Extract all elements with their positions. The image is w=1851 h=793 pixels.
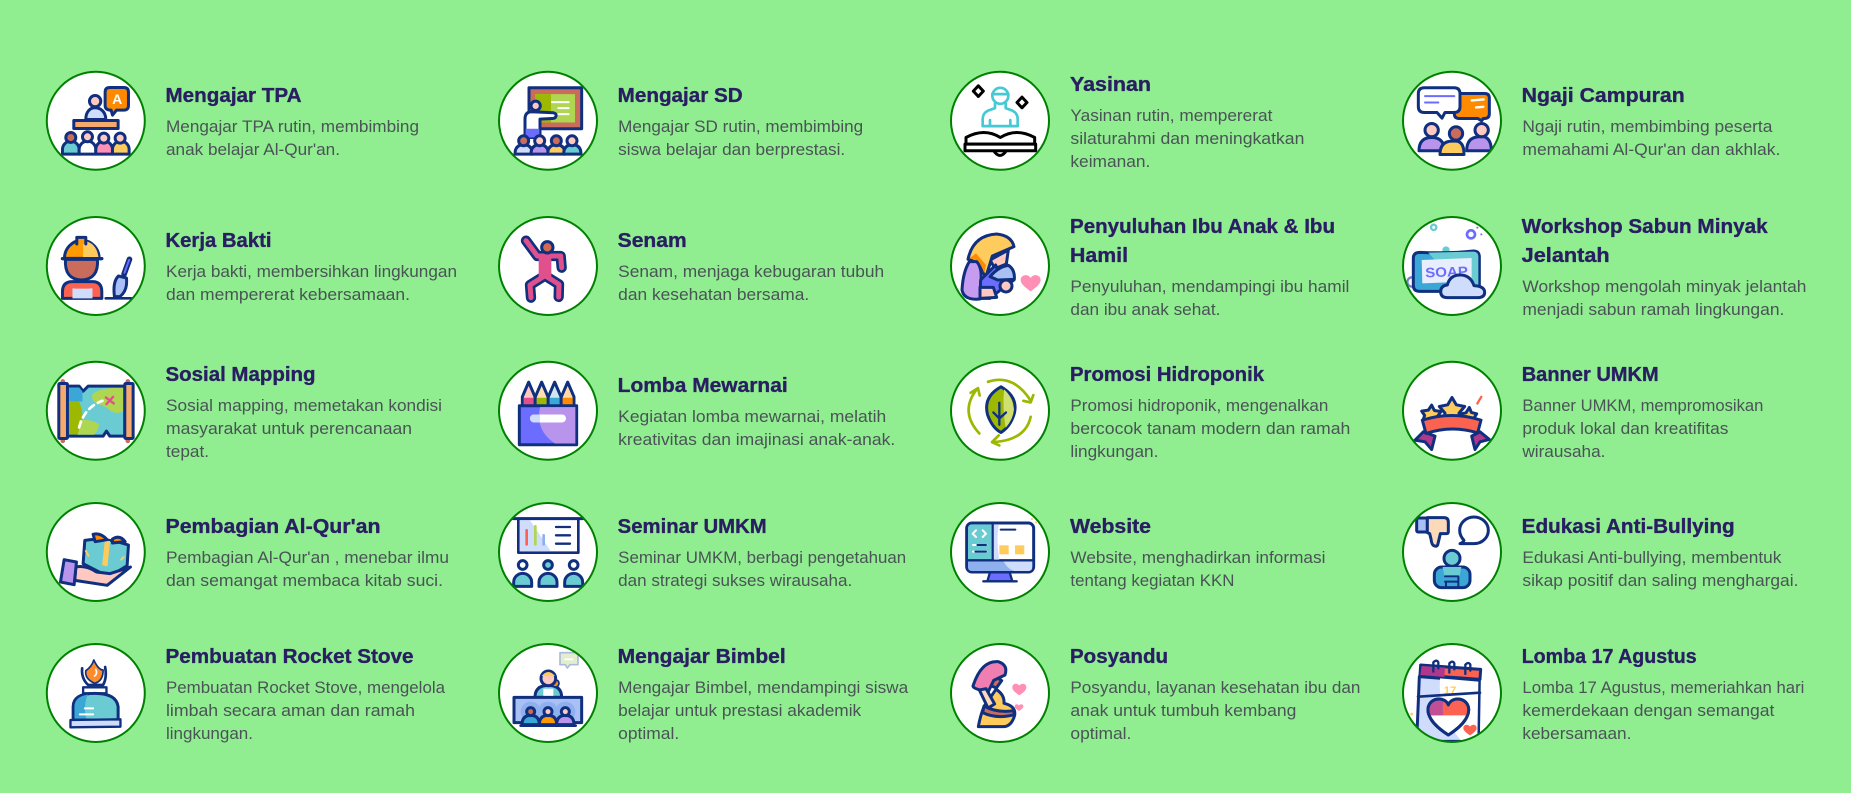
heading: Promosi Hidroponik bbox=[1070, 364, 1265, 386]
description: Workshop mengolah minyak jelantah bbox=[1522, 278, 1806, 296]
description: masyarakat untuk perencanaan bbox=[166, 420, 412, 438]
description: Pembagian Al-Qur'an , menebar ilmu bbox=[166, 549, 449, 567]
description bbox=[1522, 278, 1806, 319]
description: tentang kegiatan KKN bbox=[1070, 572, 1234, 590]
icon: mother holding baby bbox=[951, 217, 1049, 315]
card: Promosi Hidroponik bbox=[951, 362, 1350, 461]
description bbox=[1070, 549, 1325, 590]
description: Banner UMKM, mempromosikan bbox=[1522, 397, 1763, 415]
card: Mengajar Bimbel bbox=[499, 644, 909, 743]
description bbox=[1522, 118, 1780, 159]
description: lingkungan. bbox=[1070, 443, 1158, 461]
heading: Edukasi Anti-Bullying bbox=[1522, 516, 1735, 538]
card: Edukasi Anti-Bullying bbox=[1403, 503, 1798, 601]
heading: Lomba Mewarnai bbox=[618, 375, 788, 397]
heading: Pembagian Al-Qur'an bbox=[166, 516, 380, 538]
heading: Hamil bbox=[1070, 245, 1128, 267]
heading bbox=[1522, 216, 1769, 267]
heading: Yasinan bbox=[1070, 74, 1151, 96]
description: Posyandu, layanan kesehatan ibu dan bbox=[1070, 679, 1360, 697]
icon: group discussion bbox=[1403, 72, 1501, 170]
icon: box of crayons bbox=[499, 362, 597, 460]
heading: Penyuluhan Ibu Anak & Ibu bbox=[1070, 216, 1335, 238]
icon: construction worker with trowel bbox=[47, 217, 145, 315]
description bbox=[618, 549, 906, 590]
card: Yasinan bbox=[951, 72, 1304, 171]
card: Mengajar SD bbox=[499, 72, 863, 170]
icon: treasure map scroll bbox=[47, 362, 145, 460]
description: dan ibu anak sehat. bbox=[1070, 301, 1220, 319]
heading: Banner UMKM bbox=[1522, 364, 1659, 386]
description: anak belajar Al-Qur'an. bbox=[166, 141, 340, 159]
description: dan mempererat kebersamaan. bbox=[166, 286, 410, 304]
heading: Kerja Bakti bbox=[166, 230, 272, 252]
icon: thumbs down and person bbox=[1403, 503, 1501, 601]
description bbox=[166, 549, 449, 590]
description: Penyuluhan, mendampingi ibu hamil bbox=[1070, 278, 1349, 296]
description: optimal. bbox=[618, 725, 679, 743]
icon: camping gas stove bbox=[47, 644, 145, 742]
heading: Pembuatan Rocket Stove bbox=[166, 646, 414, 668]
card: Website bbox=[951, 503, 1325, 601]
description: optimal. bbox=[1070, 725, 1131, 743]
icon: exercising figure bbox=[499, 217, 597, 315]
description: keimanan. bbox=[1070, 153, 1150, 171]
icon: seminar presentation bbox=[499, 503, 597, 601]
heading bbox=[1070, 216, 1335, 267]
heading: Senam bbox=[618, 230, 687, 252]
description: bercocok tanam modern dan ramah bbox=[1070, 420, 1350, 438]
icon: ribbon banner with stars bbox=[1403, 362, 1501, 460]
description: Ngaji rutin, membimbing peserta bbox=[1522, 118, 1773, 136]
icon: person with open book bbox=[951, 72, 1049, 170]
icon: soap bar with foam bbox=[1403, 217, 1501, 315]
heading: Jelantah bbox=[1522, 245, 1610, 267]
card: Lomba Mewarnai bbox=[499, 362, 895, 460]
description: Pembuatan Rocket Stove, mengelola bbox=[166, 679, 446, 697]
heading: Posyandu bbox=[1070, 646, 1168, 668]
description bbox=[1522, 679, 1804, 743]
card: Posyandu bbox=[951, 644, 1360, 743]
card: Workshop Sabun Minyak Jelantah bbox=[1403, 216, 1806, 319]
card: Seminar UMKM bbox=[499, 503, 906, 601]
description: sikap positif dan saling menghargai. bbox=[1522, 572, 1798, 590]
description: Kegiatan lomba mewarnai, melatih bbox=[618, 408, 886, 426]
icon: teacher with students bbox=[47, 72, 145, 170]
description: kemerdekaan dengan semangat bbox=[1522, 702, 1775, 720]
card: Senam bbox=[499, 217, 884, 315]
heading: Ngaji Campuran bbox=[1522, 85, 1685, 107]
card: Penyuluhan Ibu Anak & Ibu Hamil bbox=[951, 216, 1349, 319]
description: Mengajar Bimbel, mendampingi siswa bbox=[618, 679, 909, 697]
icon: leaf with recycle arrows bbox=[951, 362, 1049, 460]
icon: hand holding a gift bbox=[47, 503, 145, 601]
card: Banner UMKM bbox=[1403, 362, 1763, 461]
description bbox=[618, 408, 895, 449]
description: Website, menghadirkan informasi bbox=[1070, 549, 1325, 567]
heading: Mengajar Bimbel bbox=[618, 646, 786, 668]
description bbox=[618, 118, 863, 159]
icon: calendar with heart bbox=[1403, 644, 1501, 742]
description: kebersamaan. bbox=[1522, 725, 1631, 743]
icon: tutor with students bbox=[499, 644, 597, 742]
description: silaturahmi dan meningkatkan bbox=[1070, 130, 1304, 148]
icon: teacher at blackboard bbox=[499, 72, 597, 170]
description: Senam, menjaga kebugaran tubuh bbox=[618, 263, 884, 281]
description: Edukasi Anti-bullying, membentuk bbox=[1522, 549, 1782, 567]
description bbox=[166, 679, 446, 743]
description bbox=[1070, 679, 1360, 743]
card: Mengajar TPA bbox=[47, 72, 419, 170]
heading: Seminar UMKM bbox=[618, 516, 767, 538]
description: lingkungan. bbox=[166, 725, 253, 743]
description: produk lokal dan kreatifitas bbox=[1522, 420, 1728, 438]
heading: Mengajar TPA bbox=[166, 85, 302, 107]
description: Kerja bakti, membersihkan lingkungan bbox=[166, 263, 457, 281]
card: Sosial Mapping bbox=[47, 362, 442, 461]
heading: Sosial Mapping bbox=[166, 364, 316, 386]
description bbox=[1522, 549, 1798, 590]
description bbox=[1521, 397, 1763, 461]
description: anak untuk tumbuh kembang bbox=[1070, 702, 1296, 720]
card: Ngaji Campuran bbox=[1403, 72, 1780, 170]
description: limbah secara aman dan ramah bbox=[166, 702, 415, 720]
description bbox=[618, 263, 884, 304]
description bbox=[618, 679, 909, 743]
icon: pregnant mother with hearts bbox=[951, 644, 1049, 742]
description bbox=[166, 397, 442, 461]
description: siswa belajar dan berprestasi. bbox=[618, 141, 845, 159]
description: kreativitas dan imajinasi anak-anak. bbox=[618, 431, 895, 449]
description: Mengajar TPA rutin, membimbing bbox=[166, 118, 419, 136]
description: memahami Al-Qur'an dan akhlak. bbox=[1522, 141, 1780, 159]
heading: Lomba 17 Agustus bbox=[1522, 646, 1697, 668]
description bbox=[1070, 397, 1350, 461]
description: Yasinan rutin, mempererat bbox=[1070, 107, 1273, 125]
description: Seminar UMKM, berbagi pengetahuan bbox=[618, 549, 906, 567]
heading: Workshop Sabun Minyak bbox=[1522, 216, 1769, 238]
card: Kerja Bakti bbox=[47, 217, 457, 315]
icon: teacher with students: A bbox=[112, 91, 122, 107]
icon: computer monitor bbox=[951, 503, 1049, 601]
description: belajar untuk prestasi akademik bbox=[618, 702, 862, 720]
description: Mengajar SD rutin, membimbing bbox=[618, 118, 863, 136]
description: tepat. bbox=[166, 443, 209, 461]
description: dan kesehatan bersama. bbox=[618, 286, 809, 304]
description: Sosial mapping, memetakan kondisi bbox=[166, 397, 442, 415]
card: Pembagian Al-Qur'an bbox=[47, 503, 449, 601]
icon: soap bar with foam: SOAP bbox=[1425, 264, 1468, 280]
description: dan semangat membaca kitab suci. bbox=[166, 572, 443, 590]
description: Lomba 17 Agustus, memeriahkan hari bbox=[1522, 679, 1804, 697]
description bbox=[1070, 107, 1304, 171]
card: Lomba 17 Agustus bbox=[1403, 644, 1804, 743]
heading: Website bbox=[1070, 516, 1151, 538]
description: menjadi sabun ramah lingkungan. bbox=[1522, 301, 1784, 319]
heading: Mengajar SD bbox=[618, 85, 743, 107]
description bbox=[1070, 278, 1349, 319]
description: dan strategi sukses wirausaha. bbox=[618, 572, 852, 590]
description: wirausaha. bbox=[1521, 443, 1605, 461]
description: Promosi hidroponik, mengenalkan bbox=[1070, 397, 1328, 415]
description bbox=[166, 118, 419, 159]
description bbox=[166, 263, 457, 304]
card: Pembuatan Rocket Stove bbox=[47, 644, 446, 743]
icon: calendar with heart: 17 bbox=[1444, 685, 1456, 697]
